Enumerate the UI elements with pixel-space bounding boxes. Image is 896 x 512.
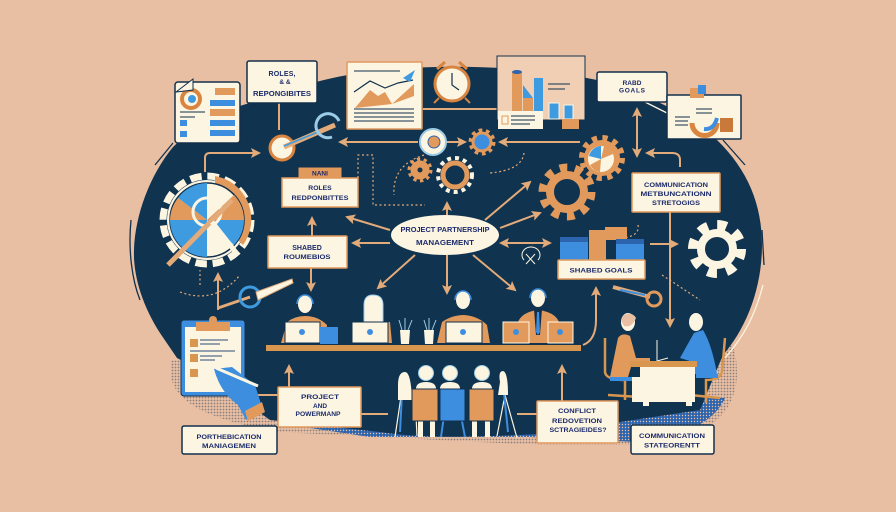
icon: key left	[218, 279, 293, 308]
table top	[266, 345, 581, 351]
person two	[352, 295, 392, 343]
gears: centre cluster	[409, 129, 493, 192]
dark navy oval background	[134, 67, 762, 437]
central ellipse: project partnership management	[391, 215, 499, 255]
pencil cups	[399, 318, 436, 344]
card: project and partnership	[278, 387, 361, 427]
card: communication methods strategies: METBUNCATIONN	[640, 191, 712, 198]
card: rapid goals: RABD	[623, 80, 642, 87]
connector arrows	[180, 103, 700, 414]
card: communication methods strategies	[632, 173, 720, 212]
card: conflict resolution strategies: CONFLICT	[558, 408, 597, 415]
clipboard	[181, 316, 245, 396]
central ellipse: project partnership management: PROJECT PARTNERSHIP	[400, 225, 490, 234]
card: shared routines	[268, 236, 347, 268]
gear: cream gear	[693, 225, 741, 273]
card: communication methods strategies: STRETOGIGS	[652, 200, 700, 207]
card: roles and responsibilities: ROLES,	[268, 71, 296, 78]
card: task list	[175, 79, 240, 143]
card: shared routines: ROUMEBIOS	[284, 254, 331, 261]
gear: large left gear	[163, 176, 251, 265]
card: project and partnership: PROJECT	[301, 394, 339, 401]
card: document with gauge	[667, 85, 741, 139]
card: portfolio management label: PORTHEBICATION	[196, 434, 262, 441]
card: conflict resolution strategies: SCTRAGIEIDES?	[550, 427, 606, 434]
icon: wrench	[270, 114, 339, 160]
card: roles and responsibilities: & &	[279, 79, 291, 86]
gear: orange gear	[543, 168, 591, 216]
halftone shadows	[170, 344, 737, 445]
icon: small crossed circle	[522, 247, 540, 264]
card: conflict resolution strategies	[537, 401, 618, 443]
gear: pie gear	[582, 138, 622, 178]
card: communication statement: COMMUNICATION	[639, 433, 705, 440]
icon: key right	[613, 287, 661, 306]
person three	[437, 291, 490, 343]
central ellipse: project partnership management: MANAGEMENT	[416, 238, 474, 247]
outer ring arcs	[130, 78, 764, 358]
person four	[503, 289, 573, 343]
meeting table group	[395, 366, 517, 438]
card: bar chart	[497, 56, 585, 129]
card: shared goals: SHABED GOALS	[570, 268, 633, 274]
card: rapid goals	[597, 72, 667, 102]
card: conflict resolution strategies: REDOVETION	[552, 418, 602, 425]
card: portfolio management label	[182, 426, 277, 454]
person one	[281, 295, 338, 344]
card: project and partnership: AND	[313, 403, 327, 410]
card: name tag and roles: ROLES	[308, 185, 332, 192]
stacked blocks	[560, 227, 644, 260]
card: portfolio management label: MANIAGEMEN	[202, 443, 256, 450]
card: communication methods strategies: COMMUNICATION	[644, 182, 708, 189]
card: communication statement: STATEORENTT	[644, 442, 700, 450]
card: shared goals	[558, 260, 645, 279]
card: line chart	[347, 62, 422, 129]
card: name tag and roles: NANI	[312, 170, 328, 178]
right desk with two people	[605, 313, 725, 406]
card: communication statement	[631, 425, 714, 454]
card: rapid goals: GOALS	[619, 88, 646, 94]
card: name tag and roles	[282, 167, 358, 207]
icon: alarm clock	[434, 62, 470, 103]
card: name tag and roles: REDPONBITTES	[292, 195, 349, 202]
card: shared routines: SHABED	[292, 245, 322, 252]
card: roles and responsibilities: REPONGIBITES	[253, 91, 311, 98]
card: project and partnership: POWERMANP	[296, 411, 341, 418]
people at long table	[266, 289, 581, 351]
card: roles and responsibilities	[247, 61, 317, 103]
hand with pen	[214, 367, 265, 421]
